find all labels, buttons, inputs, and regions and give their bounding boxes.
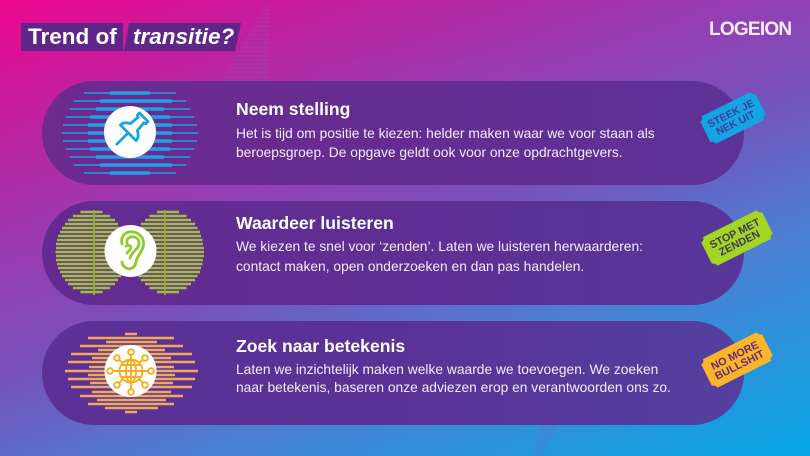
logo: LOGEION: [709, 19, 791, 40]
ticket: No more bullshit: NO MORE: [709, 339, 761, 373]
text: Waardeer luisteren: We kiezen te snel voor ‘zenden’. Laten we luisteren herwaarderen:: [236, 239, 643, 254]
text: Zoek naar betekenis: naar betekenis, baseren onze adviezen erop en verantwoorden ons zo.: [236, 380, 671, 395]
ticket: Steek je nek uit: NEK UIT: [714, 108, 758, 138]
text: Neem stelling: Het is tijd om positie te kiezen: helder maken waar we voor staan als: [236, 126, 655, 141]
text: Neem stelling: [236, 126, 655, 160]
text: Zoek naar betekenis: [236, 362, 671, 395]
text: Waardeer luisteren: contact maken, open onderzoeken en dan pas handelen.: [236, 259, 584, 274]
title box: Trend of: Trend of: [28, 24, 117, 49]
panel: Neem stelling: [42, 81, 744, 185]
text: Neem stelling: beroepsgroep. De opgave geldt ook voor onze opdrachtgevers.: [236, 145, 623, 160]
ticket: Stop met zenden: STOP MET: [708, 216, 763, 252]
ticket: Stop met zenden: ZENDEN: [717, 228, 762, 259]
heading: Neem stelling: Neem stelling: [236, 99, 350, 119]
panel: Waardeer luisteren: [42, 201, 744, 305]
heading: Zoek naar betekenis: Zoek naar betekenis: [236, 336, 405, 356]
ticket: Steek je nek uit: STEEK JE: [706, 97, 756, 131]
title: [21, 23, 241, 51]
text: Zoek naar betekenis: Laten we inzichtelijk maken welke waarde we toevoegen. We zoeken: [236, 362, 658, 377]
heading: Waardeer luisteren: Waardeer luisteren: [236, 213, 394, 233]
text: Waardeer luisteren: [236, 239, 643, 274]
ticket: No more bullshit: BULLSHIT: [713, 348, 767, 383]
title box: transitie?: transitie?: [133, 24, 234, 49]
panel: Zoek naar betekenis: [42, 321, 744, 425]
